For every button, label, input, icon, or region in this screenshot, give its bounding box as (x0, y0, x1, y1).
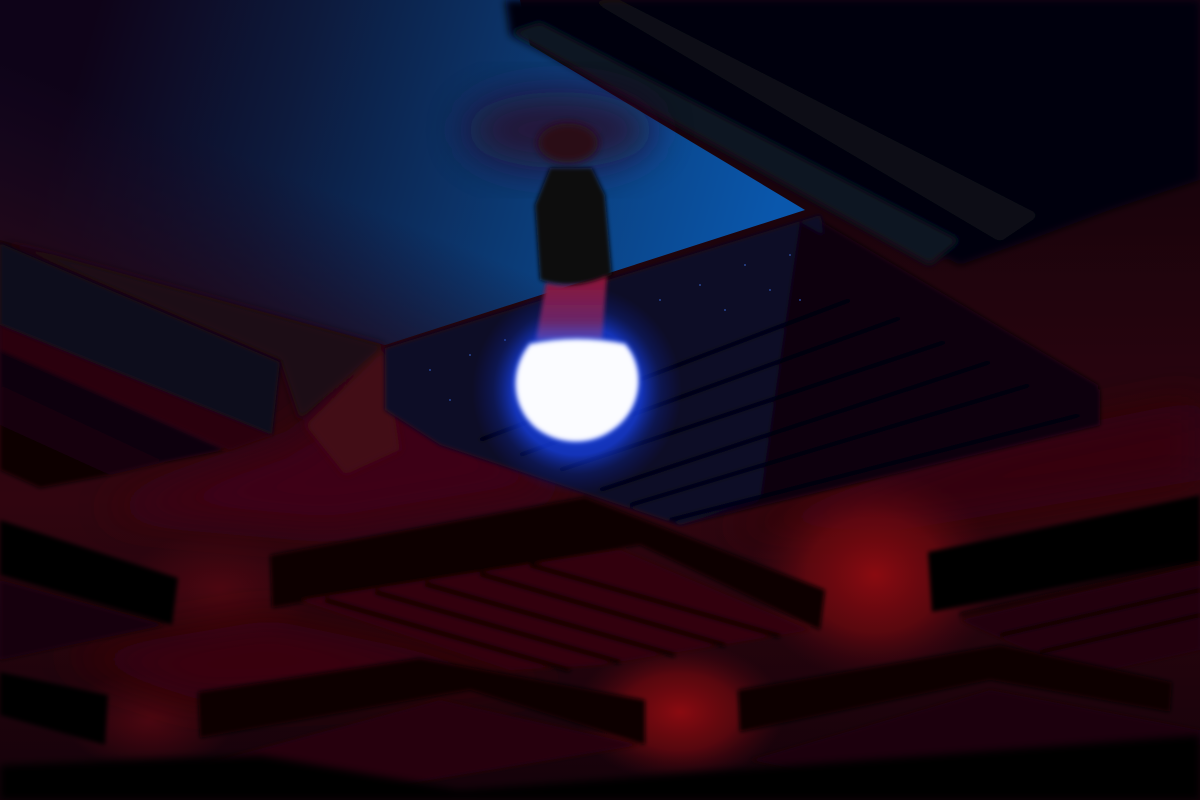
foam panel: lower right (928, 495, 1200, 675)
globe (516, 339, 638, 442)
foam panel: center, blue-lit (385, 215, 1100, 525)
red beam corner facet (0, 240, 400, 475)
foam panel: bottom right (738, 645, 1200, 790)
socket (535, 168, 612, 285)
mount (538, 123, 598, 163)
foam panel: lower center (270, 497, 825, 670)
neck (536, 276, 607, 340)
foam panel: bottom center (198, 658, 645, 790)
foam panel: left (0, 243, 280, 488)
light halo (472, 285, 682, 495)
foam panel: top right (505, 0, 1200, 265)
blue ceiling square (0, 0, 805, 345)
red beam glows (60, 350, 1200, 782)
speckle on center panel (429, 254, 801, 401)
bottom shadow (0, 735, 1200, 800)
red halo around bulb mount (465, 92, 655, 168)
right side shading on center panel (680, 222, 1100, 525)
foam panel: lower left (0, 520, 178, 745)
bulb (472, 123, 682, 495)
